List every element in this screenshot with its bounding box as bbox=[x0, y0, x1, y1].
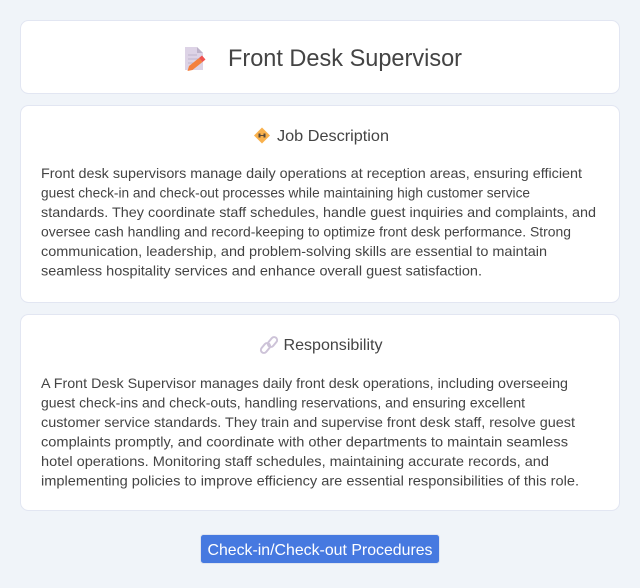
text block: responsibility: implementing policies to improve efficiency are essential responsibilities of this role. bbox=[41, 472, 579, 488]
text block: responsibility: hotel operations. Monitoring staff schedules, maintaining accurate records, and bbox=[41, 453, 549, 469]
icon: chain link bbox=[260, 336, 278, 354]
text block: responsibility: complaints promptly, and coordinate with other departments to maintain seamless bbox=[41, 434, 568, 450]
text block: responsibility: customer service standards. They train and supervise front desk staff, resolve guest bbox=[41, 414, 575, 430]
text block: responsibility: A Front Desk Supervisor manages daily front desk operations, including overseeing bbox=[41, 375, 568, 391]
heading: job description: Job Description bbox=[277, 128, 389, 145]
text block: job description bbox=[41, 165, 596, 278]
icon: document with pencil bbox=[185, 47, 206, 71]
heading: responsibility: Responsibility bbox=[284, 337, 382, 354]
text block: job description: communication, leadership, and problem-solving skills are essential to maintain bbox=[41, 243, 547, 259]
button: check-in/check-out procedures: Check-in/Check-out Procedures bbox=[208, 542, 432, 559]
button: check-in/check-out procedures bbox=[200, 534, 440, 564]
text block: job description: Front desk supervisors manage daily operations at reception areas, ensuring efficient bbox=[41, 165, 582, 181]
text block: job description: seamless hospitality services and enhance overall guest satisfaction. bbox=[41, 262, 482, 278]
panel: responsibility bbox=[20, 314, 620, 510]
panel: job description bbox=[20, 106, 620, 302]
text block: responsibility bbox=[41, 375, 579, 488]
panel: title card bbox=[20, 20, 620, 94]
text block: job description: standards. They coordinate staff schedules, handle guest inquiries and complaints, and bbox=[41, 204, 596, 220]
heading: title: Front Desk Supervisor bbox=[228, 45, 462, 72]
text block: responsibility: guest check-ins and check-outs, handling reservations, and ensuring excellent bbox=[41, 394, 525, 410]
text block: job description: oversee cash handling and record-keeping to optimize front desk performance. Strong bbox=[41, 224, 571, 240]
icon: road sign bbox=[254, 128, 270, 144]
text block: job description: guest check-in and check-out processes while maintaining high customer service bbox=[41, 184, 530, 200]
